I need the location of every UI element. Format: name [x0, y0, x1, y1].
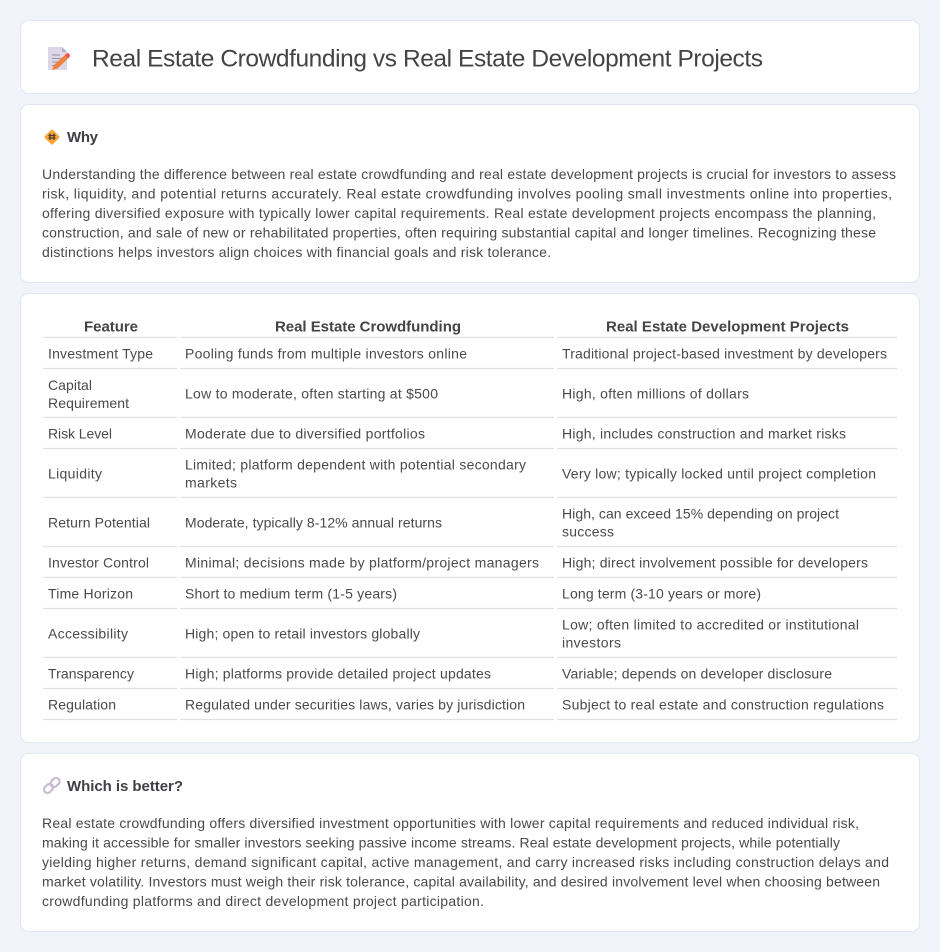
icon: chain link [42, 776, 61, 795]
row: investor control: High; direct involvement possible for developers [562, 554, 868, 570]
text block: why paragraph: Understanding the difference between real estate crowdfunding and real estate development projects is crucial for investors to assess [42, 166, 896, 182]
row: liquidity: Limited; platform dependent with potential secondary [185, 456, 526, 472]
row: investment type [48, 346, 887, 362]
panel: comparison table [20, 294, 920, 742]
row: regulation [48, 696, 884, 712]
row: investor control: Minimal; decisions made by platform/project managers [185, 554, 539, 570]
row: regulation: Regulation [48, 696, 116, 712]
heading: why: Why [67, 129, 99, 146]
row: regulation: Regulated under securities laws, varies by jurisdiction [185, 696, 525, 712]
row: accessibility: investors [562, 634, 621, 650]
row: time horizon: Short to medium term (1-5 years) [185, 586, 397, 602]
row: liquidity: Very low; typically locked until project completion [562, 466, 876, 482]
row: return potential: High, can exceed 15% depending on project [562, 506, 839, 522]
panel: title header [20, 20, 920, 94]
row: risk level: Risk Level [48, 426, 112, 442]
row: risk level: High, includes construction and market risks [562, 426, 846, 442]
row: capital requirement: Low to moderate, often starting at $500 [185, 386, 438, 402]
text block: which is better paragraph: Real estate crowdfunding offers diversified investment opportunities with lower capital requirements and reduced individual risk, [42, 815, 859, 831]
row: capital requirement: Requirement [48, 395, 129, 411]
row: investor control: Investor Control [48, 554, 149, 570]
row: capital requirement: High, often millions of dollars [562, 386, 749, 402]
row: time horizon: Long term (3-10 years or more) [562, 586, 761, 602]
row: return potential: Return Potential [48, 514, 150, 530]
text block: why paragraph: construction, and sale of new or rehabilitated properties, often requiring substantial capital and longer timelines. Recognizing these [42, 224, 876, 240]
icon: diamond sign [44, 129, 60, 145]
row: risk level: Moderate due to diversified portfolios [185, 426, 425, 442]
panel: which is better [20, 754, 920, 932]
text block: which is better paragraph: market volatility. Investors must weigh their risk tolerance, capital availability, and desired involvement level when choosing between [42, 874, 880, 890]
table header: Real Estate Crowdfunding [275, 318, 461, 336]
table header: Feature [84, 318, 138, 336]
row: return potential [48, 506, 839, 540]
table rules [43, 338, 897, 720]
row: return potential: Moderate, typically 8-12% annual returns [185, 514, 442, 530]
row: investment type: Traditional project-based investment by developers [562, 346, 887, 362]
title: Real Estate Crowdfunding vs Real Estate Development Projects [92, 46, 763, 72]
text block: which is better paragraph [42, 815, 889, 909]
row: liquidity: markets [185, 474, 237, 490]
row: investment type: Pooling funds from multiple investors online [185, 346, 467, 362]
row: transparency: Variable; depends on developer disclosure [562, 666, 832, 682]
row: return potential: success [562, 524, 614, 540]
table header [84, 318, 849, 336]
row: capital requirement: Capital [48, 377, 92, 393]
text block: why paragraph: distinctions helps investors align choices with financial goals and risk tolerance. [42, 244, 551, 260]
row: regulation: Subject to real estate and construction regulations [562, 696, 884, 712]
row: risk level [48, 426, 846, 442]
row: transparency: High; platforms provide detailed project updates [185, 666, 491, 682]
text block: which is better paragraph: yielding higher returns, demand significant capital, active management, and carry increased risks including construction delays and [42, 854, 889, 870]
row: capital requirement [48, 377, 749, 411]
text block: why paragraph [42, 166, 896, 260]
text block: which is better paragraph: making it accessible for smaller investors seeking passive income streams. Real estate development projects, while potentially [42, 834, 840, 850]
icon: document with pencil [48, 47, 70, 70]
heading: which is better: Which is better? [67, 778, 183, 795]
row: liquidity [48, 456, 876, 490]
row: investor control [48, 554, 868, 570]
panel: why [20, 104, 920, 282]
text block: which is better paragraph: crowdfunding platforms and direct development project participation. [42, 893, 484, 909]
row: transparency: Transparency [48, 666, 134, 682]
row: investment type: Investment Type [48, 346, 153, 362]
row: accessibility: Low; often limited to accredited or institutional [562, 616, 859, 632]
text block: why paragraph: risk, liquidity, and potential returns accurately. Real estate crowdfunding involves pooling small investments online into properties, [42, 186, 892, 202]
row: time horizon [48, 586, 761, 602]
row: accessibility: High; open to retail investors globally [185, 626, 420, 642]
table header: Real Estate Development Projects [606, 318, 849, 336]
row: accessibility: Accessibility [48, 626, 128, 642]
row: accessibility [48, 616, 859, 650]
row: time horizon: Time Horizon [48, 586, 133, 602]
row: liquidity: Liquidity [48, 466, 102, 482]
text block: why paragraph: offering diversified exposure with typically lower capital requirements. Real estate development projects encompass the planning, [42, 205, 876, 221]
row: transparency [48, 666, 832, 682]
